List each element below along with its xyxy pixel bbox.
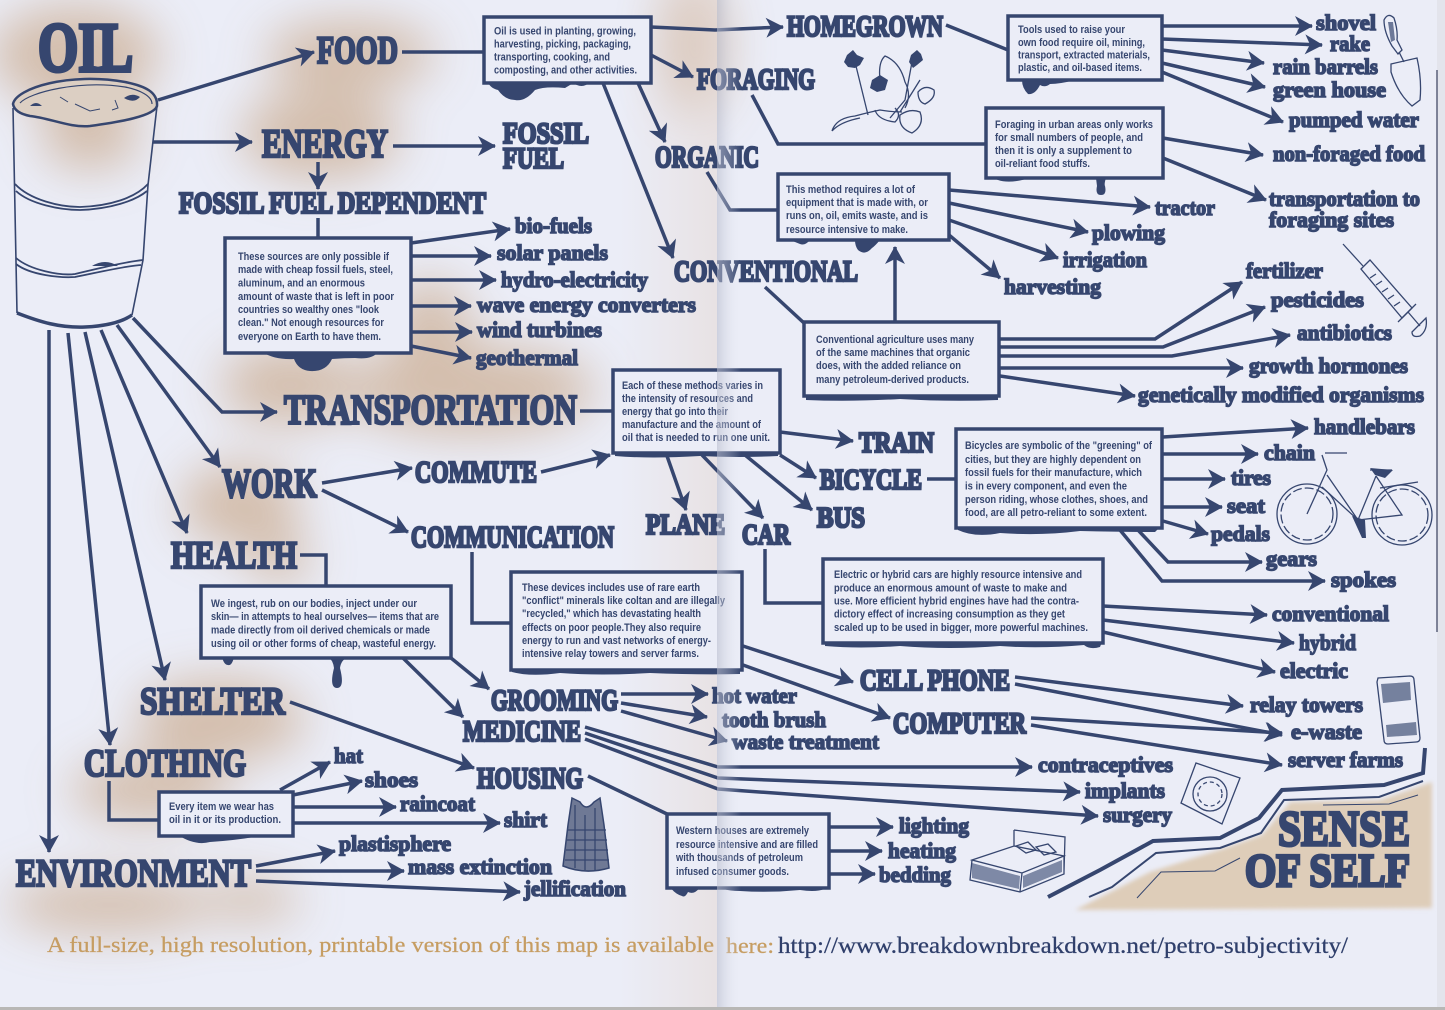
heading: BUS: BUS <box>817 502 865 534</box>
label: hybrid: hybrid <box>1299 630 1356 655</box>
arrow: to wave energy converters <box>411 304 471 308</box>
panel: fossil fuel dependent sources: These sources are only possible if <box>238 251 389 263</box>
label: irrigation: irrigation <box>1063 247 1147 272</box>
footer: availability note <box>47 932 1349 958</box>
panel: communication devices: These devices includes use of rare earth <box>522 582 700 594</box>
arrow: to jellification <box>256 881 520 892</box>
label: rain barrels: rain barrels <box>1273 54 1378 79</box>
panel: western houses: infused consumer goods. <box>676 866 789 878</box>
panel: food: composting, and other activities. <box>494 64 637 76</box>
panel: food: transporting, cooking, and <box>494 52 610 64</box>
arrow: homegrown to tools box <box>946 25 1008 50</box>
panel: fossil fuel dependent sources: amount of waste that is left in poor <box>238 291 395 303</box>
heading: BICYCLE: BICYCLE <box>820 464 922 496</box>
panel: conventional agriculture: does, with the added reliance on <box>816 360 961 372</box>
arrow: to electric <box>1103 632 1275 672</box>
icon: bed <box>970 830 1065 892</box>
arrow: to surgery <box>585 739 1098 816</box>
icon: foraged plants <box>832 50 934 133</box>
panel: transportation: Each of these methods varies in <box>622 380 763 392</box>
arrow: conventional box up to organic box <box>893 247 897 322</box>
arrow: to green house <box>1162 63 1265 87</box>
arrow: barrel to food <box>158 52 314 100</box>
label: jellification: jellification <box>523 876 626 901</box>
panel: communication devices: intensive relay towers and server farms. <box>522 648 699 660</box>
label: raincoat: raincoat <box>400 791 476 816</box>
panel: electric or hybrid cars: scaled up to be used in bigger, more powerful machines. <box>834 622 1088 634</box>
panel: food: harvesting, picking, packaging, <box>494 38 631 50</box>
arrow: work to commute <box>322 468 412 483</box>
label: contraceptives: contraceptives <box>1038 752 1173 777</box>
label: wind turbines: wind turbines <box>477 317 602 342</box>
panel: fossil fuel dependent sources: made with cheap fossil fuels, steel, <box>238 264 393 276</box>
arrow: to gears <box>1138 530 1262 562</box>
label: growth hormones: growth hormones <box>1249 353 1408 378</box>
arrow: barrel to health <box>101 330 187 533</box>
arrow: to cell phone <box>743 646 853 682</box>
arrow: barrel to energy <box>153 140 252 144</box>
arrow: to solar panels <box>411 254 491 258</box>
panel: electric or hybrid cars: dictory effect of increasing consumption as they get <box>834 608 1065 620</box>
label: hot water: hot water <box>712 683 797 708</box>
panel: communication devices <box>511 572 742 675</box>
panel: foraging: oil-reliant food stuffs. <box>995 158 1090 170</box>
heading: SENSE OF SELF <box>1245 800 1410 897</box>
heading: ENERGY: ENERGY <box>262 121 388 166</box>
arrow: to train <box>780 432 853 441</box>
arrow: health box to grooming <box>451 658 489 689</box>
arrow: to tractor <box>949 190 1150 207</box>
label: server farms: server farms <box>1288 747 1403 772</box>
label: mass extinction: mass extinction <box>408 854 552 879</box>
right page edge <box>1437 0 1445 1010</box>
sense of self tan ground <box>1075 782 1432 910</box>
arrow: to pedals <box>1163 521 1208 534</box>
label: implants: implants <box>1085 778 1165 803</box>
arrow: to genetically modified organisms <box>1000 376 1135 396</box>
panel: western houses: resource intensive and are filled <box>676 839 818 851</box>
panel: food <box>484 17 651 100</box>
label: tires: tires <box>1231 465 1271 490</box>
arrow: barrel to shelter <box>85 332 165 680</box>
label: tooth brush: tooth brush <box>722 707 826 732</box>
footer: availability note: http://www.breakdownbreakdown.net/petro-subjectivity/ <box>778 933 1349 958</box>
heading: FORAGING: FORAGING <box>697 63 815 96</box>
arrow: conventional to box <box>765 287 804 323</box>
arrow: to shirt <box>293 821 500 825</box>
arrow: to computer <box>743 665 890 718</box>
heading: GROOMING: GROOMING <box>491 684 618 717</box>
arrow: energy to fossil fuel <box>393 144 495 148</box>
label: genetically modified organisms: genetically modified organisms <box>1138 382 1424 407</box>
panel: western houses: with thousands of petroleum <box>675 852 803 864</box>
connector: housing to western houses box <box>588 776 667 814</box>
heading: PLANE: PLANE <box>646 509 725 541</box>
label: conventional: conventional <box>1272 601 1389 626</box>
panel: organic: resource intensive to make. <box>786 224 908 236</box>
label: green house: green house <box>1273 77 1386 102</box>
arrow: to pesticides <box>1000 307 1265 347</box>
bottom page edge <box>0 1007 1445 1010</box>
heading: SHELTER: SHELTER <box>140 680 286 723</box>
label: plastisphere: plastisphere <box>339 831 451 856</box>
panel: communication devices: effects on poor people.They also require <box>522 622 701 634</box>
panel: electric or hybrid cars: produce an enormous amount of waste to make and <box>834 582 1067 594</box>
panel: food: Oil is used in planting, growing, <box>494 26 636 38</box>
label: harvesting: harvesting <box>1004 274 1101 299</box>
label: seat: seat <box>1227 493 1266 518</box>
arrow: to waste treatment <box>621 711 727 741</box>
panel: tools for homegrown food <box>1008 16 1162 94</box>
panel: health <box>201 586 451 688</box>
label: surgery: surgery <box>1103 802 1172 827</box>
arrow: to car <box>702 455 763 518</box>
label: tractor: tractor <box>1155 195 1215 220</box>
arrow: energy to fossil fuel dependent <box>316 162 320 189</box>
arrow: to bedding <box>829 872 875 876</box>
heading: TRAIN: TRAIN <box>859 427 934 459</box>
label: handlebars: handlebars <box>1314 414 1415 439</box>
panel: fossil fuel dependent sources: everyone on Earth to have them. <box>238 331 381 343</box>
panel: transportation: energy that go into their <box>622 406 729 418</box>
label: bio-fuels: bio-fuels <box>515 213 592 238</box>
arrow: to transportation to foraging sites <box>1163 158 1266 200</box>
arrow: work to communication <box>322 490 408 532</box>
panel: tools for homegrown food: Tools used to raise your <box>1018 24 1126 36</box>
label: electric: electric <box>1280 658 1348 683</box>
panel: tools for homegrown food: own food require oil, mining, <box>1018 37 1145 49</box>
connector: health to box <box>300 555 326 586</box>
label: geothermal: geothermal <box>476 345 578 370</box>
panel: foraging <box>986 108 1163 195</box>
arrow: to growth hormones <box>1000 366 1243 370</box>
panel: bicycles: food, are all petro-reliant to some extent. <box>965 507 1147 519</box>
label: solar panels: solar panels <box>497 240 608 265</box>
footer: availability note: A full-size, high resolution, printable version of this map is available <box>47 932 714 957</box>
panel: bicycles: is in every component, and even the <box>965 480 1127 492</box>
label: non-foraged food: non-foraged food <box>1273 141 1425 166</box>
icon: condom packet <box>1181 763 1240 824</box>
panel: health: We ingest, rub on our bodies, inject under our <box>211 598 418 610</box>
panel: electric or hybrid cars <box>823 559 1103 648</box>
icon: bicycle <box>1277 453 1432 545</box>
arrow: to handlebars <box>1163 428 1308 437</box>
arrow: to tires <box>1163 477 1225 481</box>
arrow: to plastisphere <box>256 851 335 866</box>
arrow: commute to transportation box <box>541 455 610 472</box>
panel: electric or hybrid cars: use. More efficient hybrid engines have had the contra- <box>834 596 1079 608</box>
arrow: to shovel <box>1162 24 1312 28</box>
panel: communication devices: "conflict" minerals like coltan and are illegally <box>522 595 726 607</box>
label: transportation to foraging sites: foraging sites <box>1269 207 1394 232</box>
arrow: to rake <box>1162 39 1322 45</box>
panel: fossil fuel dependent sources <box>225 238 411 371</box>
heading: CELL PHONE: CELL PHONE <box>860 664 1010 697</box>
panel: foraging: then it is only a supplement to <box>995 145 1132 157</box>
arrow: to bio-fuels <box>411 229 510 243</box>
panel: clothing: oil in it or its production. <box>169 814 281 826</box>
heading: SENSE OF SELF: SENSE <box>1278 800 1410 856</box>
arrow: to bicycle <box>780 455 816 478</box>
icon: oil barrel <box>13 79 157 327</box>
panel: fossil fuel dependent sources: countries so wealthy ones "look <box>238 304 380 316</box>
arrow: cell phone to e-waste <box>1015 684 1282 735</box>
panel: fossil fuel dependent sources: aluminum, and an enormous <box>238 278 365 290</box>
panel: foraging: for small numbers of people, and <box>995 132 1143 144</box>
panel: transportation: oil that is needed to run one unit. <box>622 432 770 444</box>
label: plowing: plowing <box>1092 220 1165 245</box>
panel: organic: equipment that is made with, or <box>786 197 929 209</box>
panel: communication devices: "recycled," which has devastating health <box>522 608 701 620</box>
arrow: to spokes <box>1120 530 1325 581</box>
panel: bicycles: Bicycles are symbolic of the "greening" of <box>965 440 1152 452</box>
arrow: foraging to box <box>752 95 986 144</box>
panel: transportation <box>613 370 780 458</box>
label: spokes: spokes <box>1331 567 1396 592</box>
panel: conventional agriculture: Conventional agriculture uses many <box>816 334 975 346</box>
label: pesticides: pesticides <box>1271 287 1364 312</box>
arrow: to geothermal <box>411 346 471 358</box>
arrow: to wind turbines <box>411 330 472 334</box>
panel: western houses: Western houses are extremely <box>676 825 810 837</box>
arrow: to plowing <box>949 203 1088 232</box>
arrow: to rain barrels <box>1162 50 1264 63</box>
label: shovel: shovel <box>1316 10 1376 35</box>
heading: FOSSIL FUEL <box>503 117 589 175</box>
arrow: cell phone to relay towers <box>1015 677 1243 706</box>
label: hat: hat <box>334 743 364 768</box>
book gutter <box>717 0 741 1010</box>
arrow: to bus <box>745 455 812 510</box>
arrow: to hat <box>280 762 330 790</box>
arrow: barrel to environment <box>47 330 51 852</box>
arrow: to plane <box>667 456 686 510</box>
arrow: to seat <box>1163 505 1222 509</box>
oil stain blobs <box>0 0 725 933</box>
arrow: organic to box <box>707 172 778 210</box>
arrow: food box to organic <box>638 83 665 142</box>
label: e-waste: e-waste <box>1291 719 1362 744</box>
panel: organic: runs on, oil, emits waste, and is <box>786 210 928 222</box>
heading: CAR: CAR <box>742 519 791 551</box>
arrow: computer to server farms <box>1031 725 1282 765</box>
panel: organic <box>778 174 949 253</box>
label: pumped water: pumped water <box>1289 107 1419 132</box>
arrow: to antibiotics <box>1000 335 1290 356</box>
label: waste treatment: waste treatment <box>732 729 880 754</box>
label: fertilizer: fertilizer <box>1246 258 1323 283</box>
left page gutter tint <box>620 0 717 1010</box>
panel: foraging: Foraging in urban areas only works <box>995 119 1153 131</box>
title: OIL: OIL <box>38 10 133 87</box>
icon: smartphone <box>1377 676 1420 744</box>
footer: availability note: here: <box>726 933 774 958</box>
label: heating: heating <box>888 838 956 863</box>
connector: communication to devices box <box>472 552 510 623</box>
panel: electric or hybrid cars: Electric or hybrid cars are highly resource intensive and <box>834 569 1082 581</box>
label: gears: gears <box>1266 546 1317 571</box>
panel: bicycles: fossil fuels for their manufacture, which <box>965 467 1142 479</box>
arrow: shelter to housing <box>290 702 474 768</box>
panel: transportation: manufacture and the amount of <box>622 419 761 431</box>
heading: HEALTH: HEALTH <box>171 534 297 577</box>
icon: syringe <box>1343 244 1426 336</box>
heading: COMMUTE: COMMUTE <box>415 454 537 489</box>
panel: fossil fuel dependent sources: clean." Not enough resources for <box>238 317 385 329</box>
arrow: food box to homegrown <box>651 27 783 30</box>
label: bedding: bedding <box>879 862 951 887</box>
heading: ORGANIC: ORGANIC <box>655 139 759 174</box>
label: relay towers: relay towers <box>1250 692 1363 717</box>
heading: FOSSIL FUEL: FOSSIL <box>503 117 589 150</box>
panel: conventional agriculture: many petroleum-derived products. <box>816 374 969 386</box>
heading: CLOTHING: CLOTHING <box>84 742 246 785</box>
arrow: food to box <box>402 50 483 54</box>
arrow: to fertilizer <box>1000 282 1242 339</box>
panel: western houses <box>667 814 829 896</box>
arrow: to lighting <box>829 825 893 829</box>
arrow: to pumped water <box>1162 72 1283 122</box>
label: hydro-electricity: hydro-electricity <box>501 267 648 292</box>
label: shoes: shoes <box>365 767 418 792</box>
arrow: computer to e-waste <box>1031 718 1282 733</box>
arrow: food box to foraging <box>651 55 693 77</box>
label: wave energy converters: wave energy converters <box>477 292 696 317</box>
panel: health: made directly from oil derived chemicals or made <box>211 624 430 636</box>
label: transportation to foraging sites <box>1269 186 1420 232</box>
label: lighting: lighting <box>899 813 969 838</box>
heading: FOSSIL FUEL: FUEL <box>503 142 564 175</box>
panel: bicycles: person riding, whose clothes, shoes, and <box>965 494 1148 506</box>
arrow: to hot water <box>621 692 708 696</box>
arrow: barrel to transportation <box>133 318 277 412</box>
icon: vest <box>563 798 609 871</box>
heading: FOOD: FOOD <box>317 29 398 72</box>
heading: CONVENTIONAL: CONVENTIONAL <box>674 255 858 288</box>
label: transportation to foraging sites: transportation to <box>1269 186 1420 211</box>
label: chain: chain <box>1264 440 1315 465</box>
panel: clothing <box>159 792 293 843</box>
arrow: to chain <box>1163 452 1258 456</box>
label: pedals: pedals <box>1211 521 1270 546</box>
label: shirt: shirt <box>504 807 548 832</box>
heading: COMPUTER: COMPUTER <box>893 707 1026 740</box>
connector to energy box <box>316 218 320 238</box>
panel: clothing: Every item we wear has <box>169 801 274 813</box>
heading: HOMEGROWN: HOMEGROWN <box>787 10 943 43</box>
arrow: to implants <box>585 733 1080 792</box>
panel: conventional agriculture: of the same machines that organic <box>816 347 970 359</box>
icon: garden trowel <box>1384 15 1421 106</box>
arrow: barrel to clothing <box>68 333 110 745</box>
heading: SENSE OF SELF: OF SELF <box>1245 845 1410 897</box>
connector: clothing to box <box>109 781 158 820</box>
panel: health: skin— in attempts to heal ourselves— items that are <box>211 611 439 623</box>
arrow: food box to conventional <box>603 83 673 258</box>
panel: bicycles <box>956 429 1162 535</box>
heading: COMMUNICATION: COMMUNICATION <box>411 519 614 554</box>
arrow: to hybrid <box>1103 620 1294 643</box>
connector: bicycle to box <box>927 477 956 481</box>
panel: tools for homegrown food: plastic, and oil-based items. <box>1018 62 1142 74</box>
arrow: car to electric box <box>765 549 823 603</box>
panel: transportation: the intensity of resources and <box>622 393 753 405</box>
connector: transportation to box <box>580 409 613 413</box>
arrow: barrel to work <box>117 325 220 467</box>
heading: ENVIRONMENT: ENVIRONMENT <box>16 852 251 895</box>
label: rake: rake <box>1330 31 1370 56</box>
arrow: health box to medicine <box>403 658 463 717</box>
arrow: to hydro-electricity <box>411 278 496 282</box>
panel: communication devices: energy to run and vast networks of energy- <box>522 635 711 647</box>
heading: TRANSPORTATION: TRANSPORTATION <box>284 388 577 434</box>
arrow: to harvesting <box>949 235 1000 278</box>
road line: sense of self border <box>1048 748 1425 898</box>
heading: MEDICINE: MEDICINE <box>463 715 581 748</box>
label: antibiotics: antibiotics <box>1297 320 1392 345</box>
heading: FOSSIL FUEL DEPENDENT: FOSSIL FUEL DEPENDENT <box>179 185 486 220</box>
panel: bicycles: cities, but they are highly dependent on <box>965 454 1141 466</box>
panel: conventional agriculture <box>804 322 999 401</box>
arrow: to irrigation <box>949 220 1058 258</box>
heading: WORK: WORK <box>222 460 317 506</box>
panel: organic: This method requires a lot of <box>786 184 915 196</box>
arrow: to tooth brush <box>621 703 707 717</box>
arrow: to heating <box>829 849 882 853</box>
arrow: to non-foraged food <box>1163 138 1263 155</box>
arrow: to conventional <box>1103 606 1267 615</box>
arrow: to contraceptives <box>585 727 1032 767</box>
panel: health: using oil or other forms of cheap, wasteful energy. <box>211 638 436 650</box>
heading: HOUSING: HOUSING <box>477 762 583 795</box>
arrow: to raincoat <box>293 805 396 809</box>
panel: tools for homegrown food: transport, extracted materials, <box>1018 50 1150 62</box>
arrow: to mass extinction <box>256 869 404 873</box>
arrow: to shoes <box>293 781 362 795</box>
